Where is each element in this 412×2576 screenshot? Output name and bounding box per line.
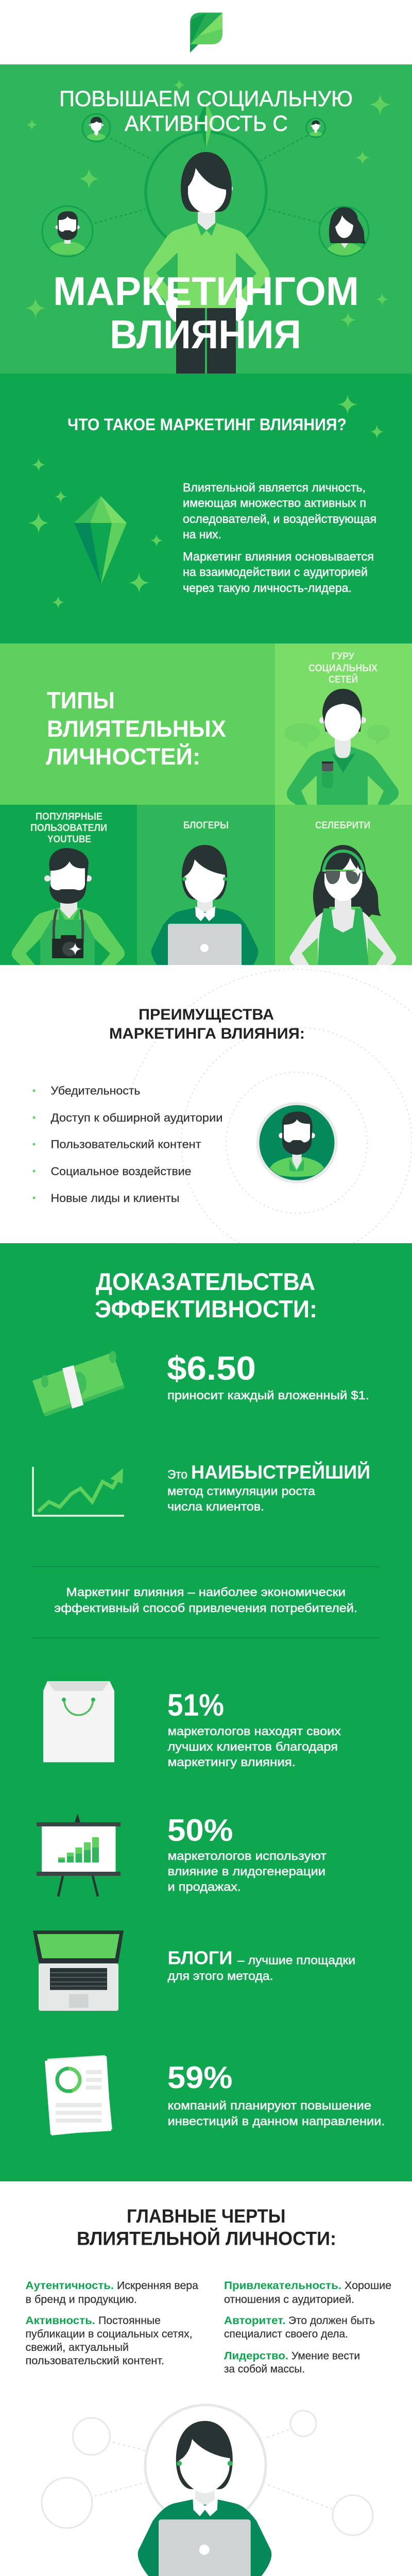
stat: 59 percent [167,2060,385,2128]
label: СОЦИАЛЬНЫХ [308,663,377,674]
speech bubbles [284,723,390,750]
heading: ЛИЧНОСТЕЙ: [46,743,200,770]
traits column right: Умение вести [291,2349,360,2362]
icon: money stack [32,1351,125,1417]
traits column right: за собой массы. [224,2363,305,2375]
heading [77,2206,336,2249]
network ring [146,132,266,252]
traits column right: отношения с аудиторией. [224,2293,354,2306]
dashed rings [129,969,412,1309]
traits column right: Это должен быть [288,2314,375,2327]
panel: what is influencer marketing [0,374,412,643]
icon: report pages [45,2055,112,2136]
traits column left: в бренд и продукцию. [26,2293,137,2306]
traits column right: Хорошие [345,2279,391,2292]
traits column left: свежий, актуальный [26,2341,129,2353]
label [30,811,107,845]
avatar: bearded man [42,206,93,257]
panel: social media guru [275,643,412,805]
label: ПОПУЛЯРНЫЕ [36,811,102,822]
callout: cost effective [55,1585,357,1615]
traits column left: Активность. [26,2314,95,2327]
avatar: top left man [82,114,110,142]
benefits list: Доступ к обширной аудитории [50,1111,222,1124]
label: YOUTUBE [47,834,91,845]
icon: camera [52,935,83,958]
definition text [183,481,376,595]
panel: key traits [0,2181,412,2576]
definition text: Влиятельной является личность, [183,481,366,494]
sparkles [25,79,391,328]
panel: benefits [33,965,412,1243]
dashed connectors [95,135,320,223]
title: ПОВЫШАЕМ СОЦИАЛЬНУЮ [59,87,353,111]
stat: 59 percent: инвестиций в данном направлении. [168,2114,385,2128]
traits column left: Постоянные [98,2314,161,2327]
label: СЕТЕЙ [329,674,358,685]
title: АКТИВНОСТЬ С [125,111,288,136]
figure: blogger with laptop [151,845,258,975]
label: ГУРУ [332,651,354,662]
heading: ГЛАВНЫЕ ЧЕРТЫ [127,2206,285,2227]
traits column right: специалист своего дела. [224,2328,348,2340]
benefits list [33,1084,222,1205]
definition text: Маркетинг влияния основывается [183,550,374,563]
avatar: bearded man [258,1104,336,1182]
panel: bloggers [137,805,275,975]
stat: fastest growing: Это [167,1468,187,1482]
definition text: оследователей, и воздействующая [183,512,376,526]
stat: 51 percent: маркетингу влияния. [168,1755,296,1769]
stat: fastest growing: НАИБЫСТРЕЙШИЙ [191,1461,370,1483]
definition text: имеющая множество активных п [183,496,366,510]
heading: ЧТО ТАКОЕ МАРКЕТИНГ ВЛИЯНИЯ? [67,415,347,434]
panel: celebrities [275,805,412,965]
heading: ВЛИЯТЕЛЬНОЙ ЛИЧНОСТИ: [77,2228,336,2249]
label: ПОЛЬЗОВАТЕЛИ [30,823,107,834]
label: СЕЛЕБРИТИ [315,820,370,831]
benefits list: Пользовательский контент [50,1138,201,1151]
sparkles [28,394,384,609]
stat: 6.50: приносит каждый вложенный $1. [167,1388,369,1402]
stat: blogs: для этого метода. [168,1969,273,1982]
label [308,651,377,685]
icon: diamond [74,496,127,585]
stat: 50 percent: и продажах. [168,1880,241,1893]
heading [95,1268,317,1323]
figure: guru [287,689,399,805]
panel: types heading [0,643,275,805]
avatar: top right man [306,118,325,137]
title: МАРКЕТИНГОМ [53,268,359,314]
benefits list: Социальное воздействие [50,1165,192,1178]
heading: ТИПЫ [47,687,115,714]
label: БЛОГЕРЫ [183,820,229,831]
traits column left: Аутентичность. [26,2279,114,2292]
callout: cost effective: эффективный способ привлечения потребителей. [55,1601,357,1615]
stat: 6.50 [167,1349,369,1402]
stat: 51 percent [167,1688,341,1769]
panel: hero [0,64,412,374]
figure: man with camera [12,848,125,965]
stat: 50 percent [167,1813,327,1893]
sunglasses [323,865,364,884]
figure: central woman [144,152,269,374]
stat: fastest growing [167,1461,370,1513]
definition text: на них. [183,528,221,541]
stat: 50 percent: маркетологов используют [168,1849,327,1862]
heading: ЭФФЕКТИВНОСТИ: [95,1295,317,1323]
definition text: через такую личность-лидера. [183,581,352,595]
icon: laptop [33,1930,124,2011]
traits column left: пользовательский контент. [26,2354,164,2367]
stat: blogs: БЛОГИ [168,1947,233,1968]
stat: 50 percent: 50% [167,1813,233,1848]
traits column right: Авторитет. [224,2314,285,2327]
traits column left: Искренняя вера [117,2279,198,2292]
icon: presentation board [37,1814,121,1896]
icon: diamond [198,101,214,148]
icon: shopping bag [43,1681,114,1762]
traits column right: Привлекательность. [224,2279,341,2292]
icon: sprout leaf logo [190,12,222,53]
stat: 6.50: $6.50 [167,1349,256,1387]
heading: МАРКЕТИНГА ВЛИЯНИЯ: [109,1025,305,1042]
panel: youtube creators [0,805,137,965]
heading: ПРЕИМУЩЕСТВА [139,1006,274,1023]
stat: 59 percent: компаний планируют повышение [168,2099,371,2112]
stat: 50 percent: влияние в лидогенерации [168,1865,325,1878]
panel: proof of effectiveness [0,1243,412,2181]
stat: 59 percent: 59% [167,2060,233,2095]
stat: blogs: – лучшие площадки [237,1954,355,1967]
figure: celebrity [290,845,396,965]
callout: cost effective: Маркетинг влияния – наиболее экономически [66,1585,346,1599]
traits column right: Лидерство. [224,2349,288,2362]
traits column left: публикации в социальных сетях, [26,2328,193,2340]
heading: ДОКАЗАТЕЛЬСТВА [96,1268,315,1295]
header: logo bar [0,0,412,64]
benefits list: Убедительность [50,1084,140,1097]
avatar: long haired woman [319,207,369,258]
heading: ВЛИЯТЕЛЬНЫХ [47,716,226,742]
benefits list: Новые лиды и клиенты [50,1192,179,1205]
traits column right [224,2279,391,2375]
title: ВЛИЯНИЯ [110,312,301,357]
stat: blogs [168,1947,355,1982]
stat: fastest growing: числа клиентов. [167,1500,264,1513]
stat: 51 percent: маркетологов находят своих [168,1724,341,1738]
icon: growth chart [33,1467,124,1516]
stat: fastest growing: метод стимуляции роста [167,1484,315,1498]
heading [109,1006,305,1042]
figure: woman with laptop [138,2421,271,2576]
network diagram [42,2405,373,2535]
heading [46,687,226,770]
definition text: на взаимодействии с аудиторией [183,565,368,579]
title [53,87,359,357]
stat: 51 percent: 51% [167,1688,224,1722]
stat: 51 percent: лучших клиентов благодаря [168,1740,338,1753]
traits column left [26,2279,198,2367]
